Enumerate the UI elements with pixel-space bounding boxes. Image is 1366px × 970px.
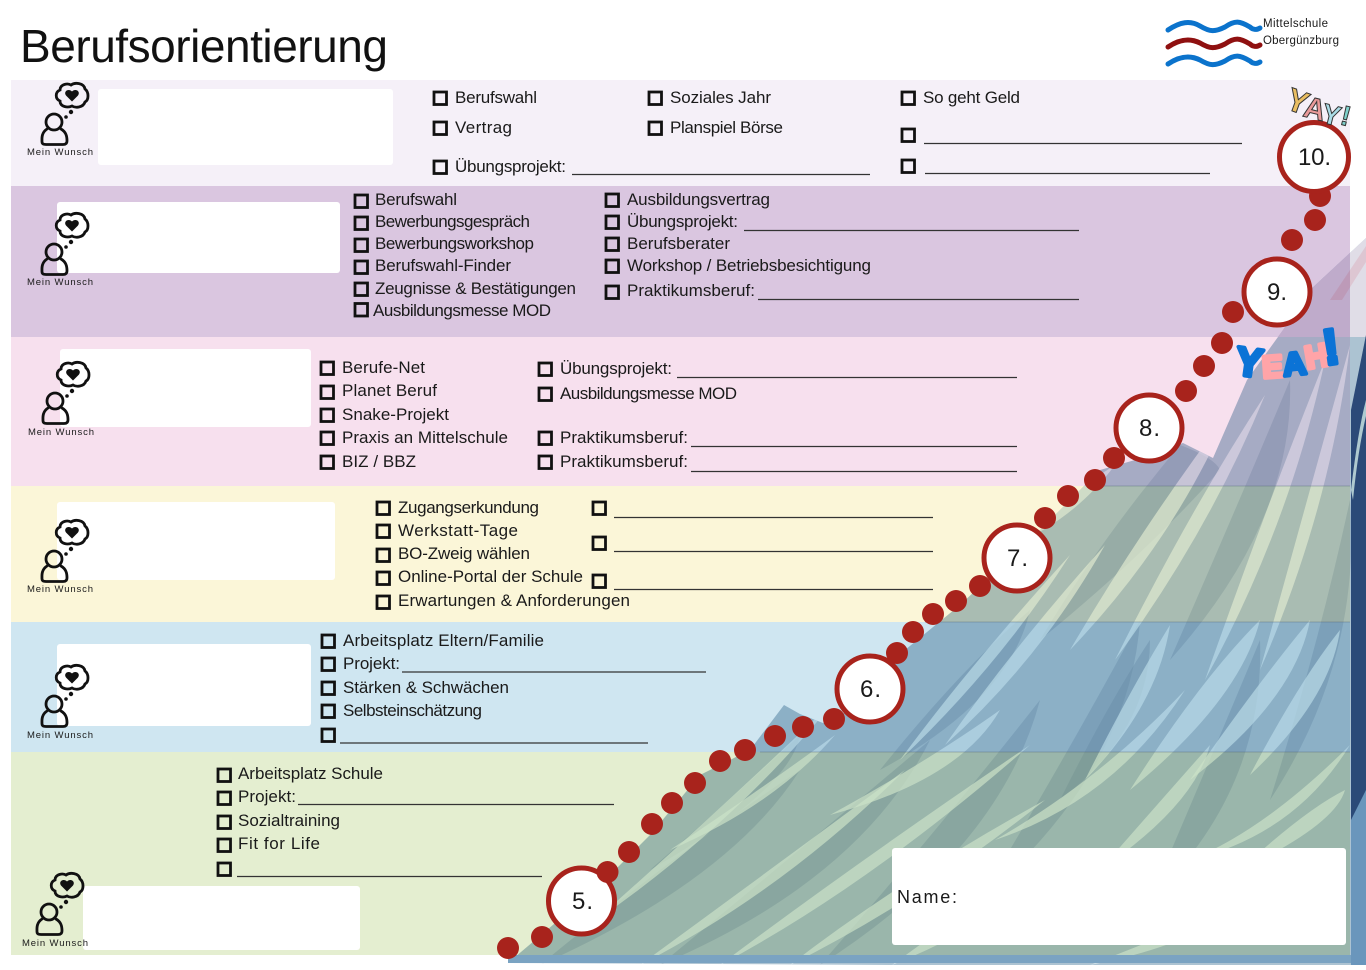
item: blank line — [218, 863, 542, 876]
item: Berufswahl-Finder: Berufswahl-Finder — [375, 256, 511, 275]
path dot over marker 5 — [596, 861, 618, 883]
item: Arbeitsplatz Eltern: Arbeitsplatz Eltern/Familie — [343, 631, 544, 650]
item: Selbsteinschätzung: Selbsteinschätzung — [343, 701, 482, 720]
school logo: Mittelschule — [1263, 18, 1328, 30]
wish icon — [42, 83, 88, 144]
item: blank line 3 — [593, 575, 933, 590]
item: Praktikumsberuf 2 — [539, 452, 1017, 472]
panel: step 8 content — [28, 349, 1017, 472]
item: Stärken und Schwächen: Stärken & Schwächen — [343, 678, 509, 697]
item: Bewerbungsgespräch: Bewerbungsgespräch — [375, 212, 530, 231]
item: Ausbildungsmesse: Ausbildungsmesse MOD — [373, 301, 551, 320]
wish box — [57, 644, 311, 726]
item: Vertrag: Vertrag — [455, 118, 512, 137]
item: Praktikumsberuf 1 — [539, 428, 1017, 447]
item: blank line 1 — [593, 502, 933, 518]
item: Projekt: Projekt: — [343, 654, 400, 673]
marker 8 — [1116, 395, 1182, 461]
school logo: Obergünzburg — [1263, 35, 1339, 47]
item: So geht Geld: So geht Geld — [923, 88, 1020, 107]
marker 5 — [548, 868, 614, 934]
item: BIZ / BBZ: BIZ / BBZ — [342, 452, 416, 471]
item: Praktikumsberuf 2: Praktikumsberuf: — [560, 452, 688, 471]
sticker: YEAH!: ! — [1319, 318, 1343, 376]
sticker: YEAH!: H — [1302, 336, 1331, 376]
item: BO-Zweig wählen: BO-Zweig wählen — [398, 544, 530, 563]
sticker: YEAH!: E — [1261, 349, 1284, 385]
wish box — [98, 89, 393, 165]
sticker: YEAH!: Y — [1233, 339, 1266, 387]
wish label: Mein Wunsch — [27, 584, 93, 595]
wish box — [83, 886, 360, 950]
item: Zugangserkundung: Zugangserkundung — [398, 498, 539, 517]
marker 6 — [837, 656, 903, 722]
wish label: Mein Wunsch — [27, 730, 93, 741]
marker 10: 10. — [1298, 144, 1331, 171]
wish icon — [43, 362, 89, 424]
item: Ausbildungsvertrag: Ausbildungsvertrag — [627, 190, 770, 209]
band: step 5 — [11, 752, 1350, 955]
panel: step 6 content — [27, 631, 706, 743]
mountain illustration — [508, 238, 1366, 965]
wish label: Mein Wunsch — [28, 427, 94, 438]
item: Berufswahl: Berufswahl — [455, 88, 537, 107]
wish label: Mein Wunsch — [22, 938, 88, 949]
item: Berufswahl: Berufswahl — [375, 190, 457, 209]
item: Bewerbungsworkshop: Bewerbungsworkshop — [375, 234, 534, 253]
wish label: Mein Wunsch — [27, 147, 93, 158]
panel: step 7 content — [27, 498, 933, 610]
marker 6: 6. — [860, 676, 881, 703]
item: Übungsprojekt — [434, 157, 870, 176]
sticker: YAY!: A — [1300, 91, 1329, 128]
sticker: YAY!: Y — [1282, 81, 1314, 122]
item: Planspiel Börse: Planspiel Börse — [670, 118, 783, 137]
item: Soziales Jahr: Soziales Jahr — [670, 88, 771, 107]
item: Planet Beruf: Planet Beruf — [342, 381, 437, 400]
marker 7 — [984, 525, 1050, 591]
item: Projekt: Projekt: — [238, 787, 296, 806]
marker 9: 9. — [1267, 279, 1287, 306]
school logo — [1168, 18, 1339, 65]
item: blank line 1 — [902, 129, 1242, 144]
item: Übungsprojekt — [539, 359, 1017, 378]
wish box — [57, 202, 340, 273]
wish box — [57, 502, 335, 580]
item: Übungsprojekt: Übungsprojekt: — [455, 157, 566, 176]
sticker: YEAH!: A — [1281, 345, 1308, 383]
name box: Name: — [897, 887, 957, 907]
wish icon — [37, 873, 83, 934]
item: Erwartungen: Erwartungen & Anforderungen — [398, 591, 630, 610]
sticker: YAY!: Y — [1319, 98, 1344, 132]
item: Übungsprojekt: Übungsprojekt: — [627, 212, 738, 231]
item: Zeugnisse: Zeugnisse & Bestätigungen — [375, 279, 576, 298]
name box — [892, 848, 1346, 945]
item: Workshop: Workshop / Betriebsbesichtigung — [627, 256, 871, 275]
marker 8: 8. — [1139, 415, 1160, 442]
item: Sozialtraining: Sozialtraining — [238, 811, 340, 830]
wish icon — [42, 213, 88, 274]
panel: step 10 content — [27, 83, 1242, 176]
item: Praktikumsberuf 1: Praktikumsberuf: — [560, 428, 688, 447]
marker 10 — [1280, 122, 1348, 192]
item: Ausbildungsmesse: Ausbildungsmesse MOD — [560, 384, 737, 403]
item: Online-Portal: Online-Portal der Schule — [398, 567, 583, 586]
item: Praxis an Mittelschule: Praxis an Mittelschule — [342, 428, 508, 447]
item: Arbeitsplatz Schule: Arbeitsplatz Schule — [238, 764, 383, 783]
item: blank line 2 — [902, 160, 1210, 174]
sticker: YEAH! — [1233, 318, 1343, 387]
band: step 10 — [11, 80, 1350, 186]
wish label: Mein Wunsch — [27, 277, 93, 288]
panel: step 5 content — [22, 764, 614, 950]
item: Fit for Life: Fit for Life — [238, 834, 320, 853]
band: step 9 — [11, 186, 1350, 337]
item: blank line — [322, 729, 648, 743]
item: Übungsprojekt: Übungsprojekt: — [560, 359, 672, 378]
item: blank line 2 — [593, 537, 933, 552]
band: step 7 — [11, 486, 1350, 622]
item: Berufsberater: Berufsberater — [627, 234, 730, 253]
marker 7: 7. — [1007, 545, 1028, 572]
sticker: YAY!: ! — [1338, 100, 1354, 132]
panel: step 9 content — [27, 190, 1079, 320]
title: Berufsorientierung — [20, 20, 388, 72]
marker 9 — [1244, 259, 1310, 325]
item: Praktikumsberuf: Praktikumsberuf: — [627, 281, 755, 300]
item: Werkstatt-Tage: Werkstatt-Tage — [398, 521, 518, 540]
path dots — [497, 185, 1331, 959]
item: Projekt — [322, 654, 706, 673]
sticker: YAY! — [1282, 81, 1354, 132]
band: step 8 — [11, 337, 1350, 486]
item: Projekt — [218, 787, 614, 806]
item: Berufe-Net: Berufe-Net — [342, 358, 425, 377]
wish icon — [42, 665, 88, 726]
item: Praktikumsberuf — [606, 281, 1079, 300]
item: Snake-Projekt: Snake-Projekt — [342, 405, 449, 424]
item: Übungsprojekt — [606, 212, 1079, 231]
marker 5: 5. — [572, 888, 593, 915]
band: step 6 — [11, 622, 1350, 752]
wish icon — [42, 520, 88, 582]
wish box — [60, 349, 311, 427]
